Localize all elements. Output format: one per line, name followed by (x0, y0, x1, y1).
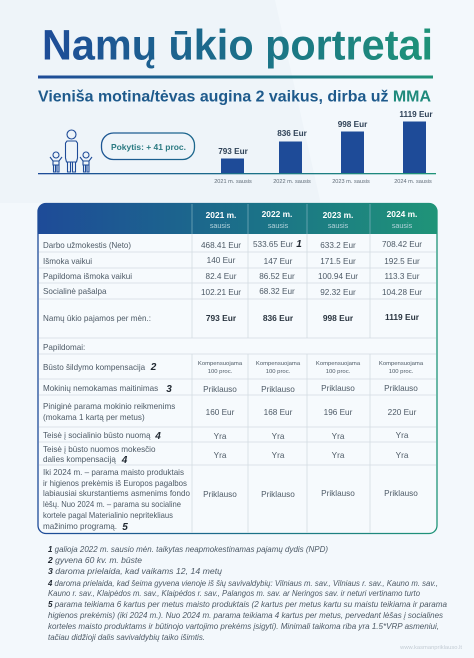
row: salary: 533.65 Eur (253, 240, 293, 249)
row: social housing: Teisė į socialinio būsto nuomą (43, 431, 151, 440)
row: salary: Darbo užmokestis (Neto) (43, 241, 131, 250)
row: heating compensation: 2 (150, 362, 157, 373)
row: child benefit: 140 Eur (207, 256, 236, 265)
row: child benefit: Išmoka vaikui (43, 257, 92, 266)
row: rent compensation: Yra (332, 451, 345, 460)
row: social allowance: 68.32 Eur (259, 287, 295, 296)
footnote 4: 4 daroma prielaida, kad šeima gyvena vienoje iš šių savivaldybių: Vilniaus m. sav., Vilniaus r. sav., Kauno m. sav., (47, 579, 438, 588)
row: rent compensation: 4 (121, 455, 128, 466)
row: social housing: Yra (272, 432, 285, 441)
icon: parent with two children (50, 130, 92, 172)
table header: 2024 m. (387, 209, 417, 219)
row: household income: 998 Eur (323, 313, 354, 323)
row: rent compensation: Yra (396, 451, 409, 460)
row: household income: 836 Eur (263, 313, 294, 323)
row: additional child benefit: 86.52 Eur (259, 272, 295, 281)
bar 2021: 793 Eur (218, 147, 249, 156)
bar 2024: 2024 m. sausis (394, 179, 432, 185)
row: salary (43, 239, 422, 250)
bar 2023: 2023 m. sausis (332, 179, 370, 185)
row: child benefit: 192.5 Eur (384, 257, 420, 266)
row: school support: 160 Eur (206, 408, 235, 417)
footnote 5: 5 parama teikiama 6 kartus per metus maisto produktais (2 kartus per metus kartu su maistu teikiama ir parama (48, 600, 448, 609)
row: heating compensation: Kompensuojama (379, 361, 424, 367)
row: heating compensation: 100 proc. (266, 369, 291, 375)
row: free school meals: Priklauso (261, 385, 295, 394)
row: heating compensation: Būsto šildymo kompensacija (43, 363, 146, 372)
row: social housing: Yra (214, 432, 227, 441)
bar 2024 (394, 110, 433, 185)
row: food support: Iki 2024 m. – parama maisto produktais (43, 468, 184, 477)
footnote 4 (47, 579, 438, 598)
bar 2021: 2021 m. sausis (214, 179, 252, 185)
row: child benefit: 147 Eur (264, 257, 293, 266)
row: salary: 468.41 Eur (201, 241, 241, 250)
row: free school meals: Priklauso (384, 384, 418, 393)
row: free school meals: Priklauso (203, 385, 237, 394)
row: rent compensation (43, 445, 409, 466)
row: food support: 5 (122, 522, 128, 533)
website url: www.kasmanpriklauso.lt (399, 645, 462, 651)
row: additional child benefit: 82.4 Eur (206, 272, 237, 281)
bar chart (38, 110, 436, 185)
subtitle: Vieniša motina/tėvas augina 2 vaikus, dirba už MMA (38, 88, 431, 106)
row: social housing: Yra (332, 432, 345, 441)
footnote 1: 1 galioja 2022 m. sausio mėn. taikytas neapmokestinamas pajamų dydis (NPD) (48, 545, 328, 554)
row: food support (43, 468, 418, 533)
row: salary: 633.2 Eur (320, 241, 356, 250)
row: salary: 1 (296, 239, 302, 250)
callout: change (102, 133, 194, 160)
table header: sausis (328, 221, 349, 230)
row: social housing: 4 (154, 431, 161, 442)
table body panel (38, 204, 437, 534)
table header: 2022 m. (262, 209, 292, 219)
row: heating compensation: 100 proc. (326, 369, 351, 375)
footnote 5 (48, 600, 448, 642)
row: additional child benefit (43, 272, 420, 281)
row: social allowance: 102.21 Eur (201, 288, 241, 297)
row: school support: 196 Eur (324, 408, 353, 417)
bar 2022: 836 Eur (277, 129, 308, 138)
bar 2023: 998 Eur (338, 120, 368, 129)
table (38, 203, 437, 534)
footnote 5: korteles maisto produktams ir būtinojo vartojimo prekėms įsigyti). Minimali taikoma riba yra 1.5*VRP asmeniui, (48, 622, 439, 631)
row: school support: 220 Eur (388, 408, 417, 417)
callout: change: Pokytis: + 41 proc. (111, 142, 186, 152)
row: additional child benefit: Papildoma išmoka vaikui (43, 272, 132, 281)
row: additional heading: Papildomai: (43, 343, 85, 352)
row: household income: Namų ūkio pajamos per mėn.: (43, 314, 151, 323)
row: heating compensation: 100 proc. (389, 369, 414, 375)
row: rent compensation: dalies kompensaciją (43, 455, 116, 464)
row: household income (43, 312, 420, 323)
row: heating compensation: Kompensuojama (256, 361, 301, 367)
table header: sausis (268, 221, 289, 230)
bar 2022 (273, 129, 311, 185)
row: free school meals: Mokinių nemokamas maitinimas (43, 384, 158, 393)
row: social housing: Yra (396, 431, 409, 440)
table header: 2023 m. (323, 210, 353, 220)
row: household income: 1119 Eur (385, 312, 420, 322)
row: food support: Priklauso (384, 489, 418, 498)
row: household income: 793 Eur (206, 313, 237, 323)
row: free school meals (43, 384, 418, 395)
row: food support: Priklauso (203, 490, 237, 499)
row: school support: (mokama 1 kartą per metus) (43, 413, 145, 422)
bar 2021 (214, 147, 252, 185)
row: heating compensation: Kompensuojama (316, 361, 361, 367)
row: rent compensation: Yra (272, 451, 285, 460)
row: child benefit: 171.5 Eur (320, 257, 356, 266)
table header: sausis (392, 221, 413, 230)
row: food support: Priklauso (261, 490, 295, 499)
title underline (38, 76, 433, 78)
footnote 2: 2 gyvena 60 kv. m. būste (47, 556, 143, 565)
footnotes (47, 545, 448, 642)
row: food support: kortele pagal Materialinio nepritekliaus (43, 511, 173, 520)
bar 2023 (332, 120, 370, 185)
row: rent compensation: Yra (214, 451, 227, 460)
row: child benefit (43, 256, 420, 266)
table header: 2021 m. (206, 210, 236, 220)
row: school support: 168 Eur (264, 408, 293, 417)
table header (38, 203, 437, 234)
row: social allowance: 92.32 Eur (320, 288, 356, 297)
row: school support (43, 402, 417, 422)
row: additional child benefit: 100.94 Eur (318, 272, 358, 281)
row: free school meals: Priklauso (321, 384, 355, 393)
footnote 5: higienos prekėmis) (iki 2024 m.). Nuo 2024 m. parama teikiama 4 kartus per metus, pervedant lėšas į socialines (48, 611, 443, 620)
footnote 5: tačiau didžioji dalis savivaldybių taiko išimtis. (48, 633, 205, 642)
row: food support: labiausiai skurstantiems asmenims fondo (43, 489, 190, 498)
row: rent compensation: Teisė į būsto nuomos mokesčio (43, 445, 156, 454)
title: Namų ūkio portretai (42, 22, 433, 70)
row: food support: lėšų. Nuo 2024 m. – parama su socialine (43, 500, 181, 509)
row: food support: ir higienos prekėmis iš Europos pagalbos (43, 479, 187, 488)
chart baseline (38, 173, 436, 174)
bar 2022: 2022 m. sausis (273, 179, 311, 185)
table header: sausis (210, 221, 231, 230)
row: food support: mažinimo programą. (43, 522, 117, 531)
row: social allowance: Socialinė pašalpa (43, 287, 107, 296)
row: school support: Piniginė parama mokinio reikmenims (43, 402, 175, 411)
bar 2024: 1119 Eur (399, 110, 433, 119)
row: additional child benefit: 113.3 Eur (385, 272, 420, 281)
row: free school meals: 3 (166, 384, 172, 395)
row: social housing (43, 431, 409, 442)
row: social allowance (43, 287, 422, 297)
footnote 4: Kauno r. sav., Klaipėdos m. sav., Klaipėdos r. sav., Palangos m. sav. ar Neringos sav. ir neturi vertinamo turto (48, 589, 421, 598)
row: heating compensation (43, 361, 424, 375)
row: heating compensation: 100 proc. (208, 369, 233, 375)
row: social allowance: 104.28 Eur (382, 288, 422, 297)
footnote 3: 3 daroma prielaida, kad vaikams 12, 14 metų (48, 567, 223, 576)
row: heating compensation: Kompensuojama (198, 361, 243, 367)
row: salary: 708.42 Eur (382, 240, 422, 249)
row: food support: Priklauso (321, 489, 355, 498)
